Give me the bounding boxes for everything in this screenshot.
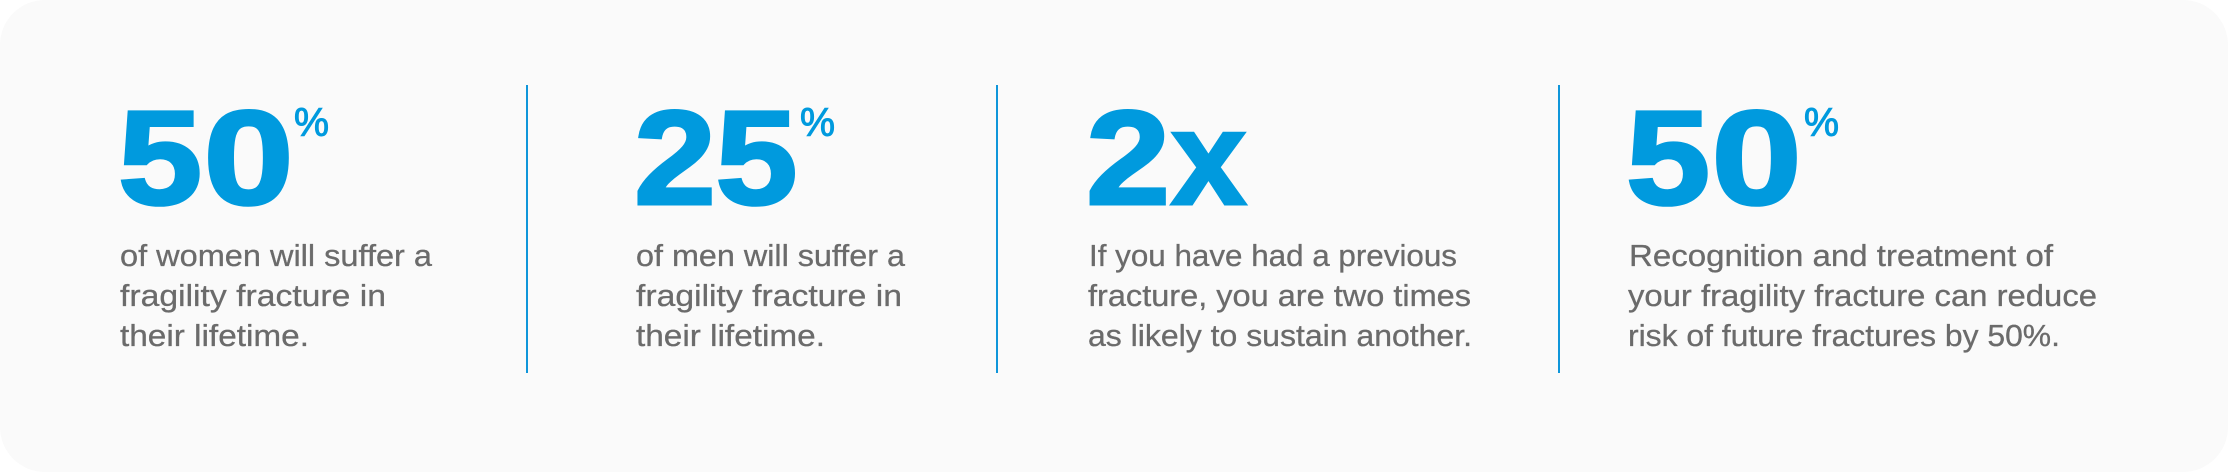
big number: 50 — [1626, 82, 1802, 233]
description: risk of future fractures by 50%. — [1628, 318, 2060, 353]
stat: 2x likelihood — [1086, 83, 1472, 353]
percent sign: % — [1804, 101, 1839, 145]
big number: 50 — [118, 82, 294, 233]
big number: 2x: 2 — [1086, 84, 1170, 233]
big number: 50: 5 — [118, 84, 202, 233]
big number: 25: 5 — [716, 82, 797, 233]
percent sign: % — [800, 101, 835, 145]
description: of men will suffer a — [636, 238, 906, 273]
description — [120, 238, 433, 353]
description: fragility fracture in — [636, 278, 902, 313]
description: of women will suffer a — [120, 238, 433, 273]
description: fracture, you are two times — [1088, 278, 1471, 313]
big number: 2x — [1086, 83, 1246, 233]
description: If you have had a previous — [1089, 238, 1457, 273]
big number: 50: 0 — [1712, 82, 1802, 233]
big number: 50: 0 — [204, 82, 294, 233]
description: fragility fracture in — [120, 278, 386, 313]
description: as likely to sustain another. — [1088, 318, 1472, 353]
big number: 25: 2 — [634, 82, 716, 233]
description — [1088, 238, 1472, 353]
description — [636, 238, 906, 353]
big number: 50: 5 — [1626, 84, 1710, 233]
description: Recognition and treatment of — [1629, 238, 2053, 273]
stat: 50% risk reduction — [1626, 82, 2097, 353]
big number: 2x: x — [1171, 83, 1246, 233]
big number: 25 — [634, 82, 797, 233]
stat: 25% of men — [634, 82, 906, 353]
description: your fragility fracture can reduce — [1628, 278, 2097, 313]
description: their lifetime. — [120, 318, 309, 353]
description — [1628, 238, 2097, 353]
stat: 50% of women — [118, 82, 433, 353]
percent sign: % — [294, 101, 329, 145]
description: their lifetime. — [636, 318, 825, 353]
